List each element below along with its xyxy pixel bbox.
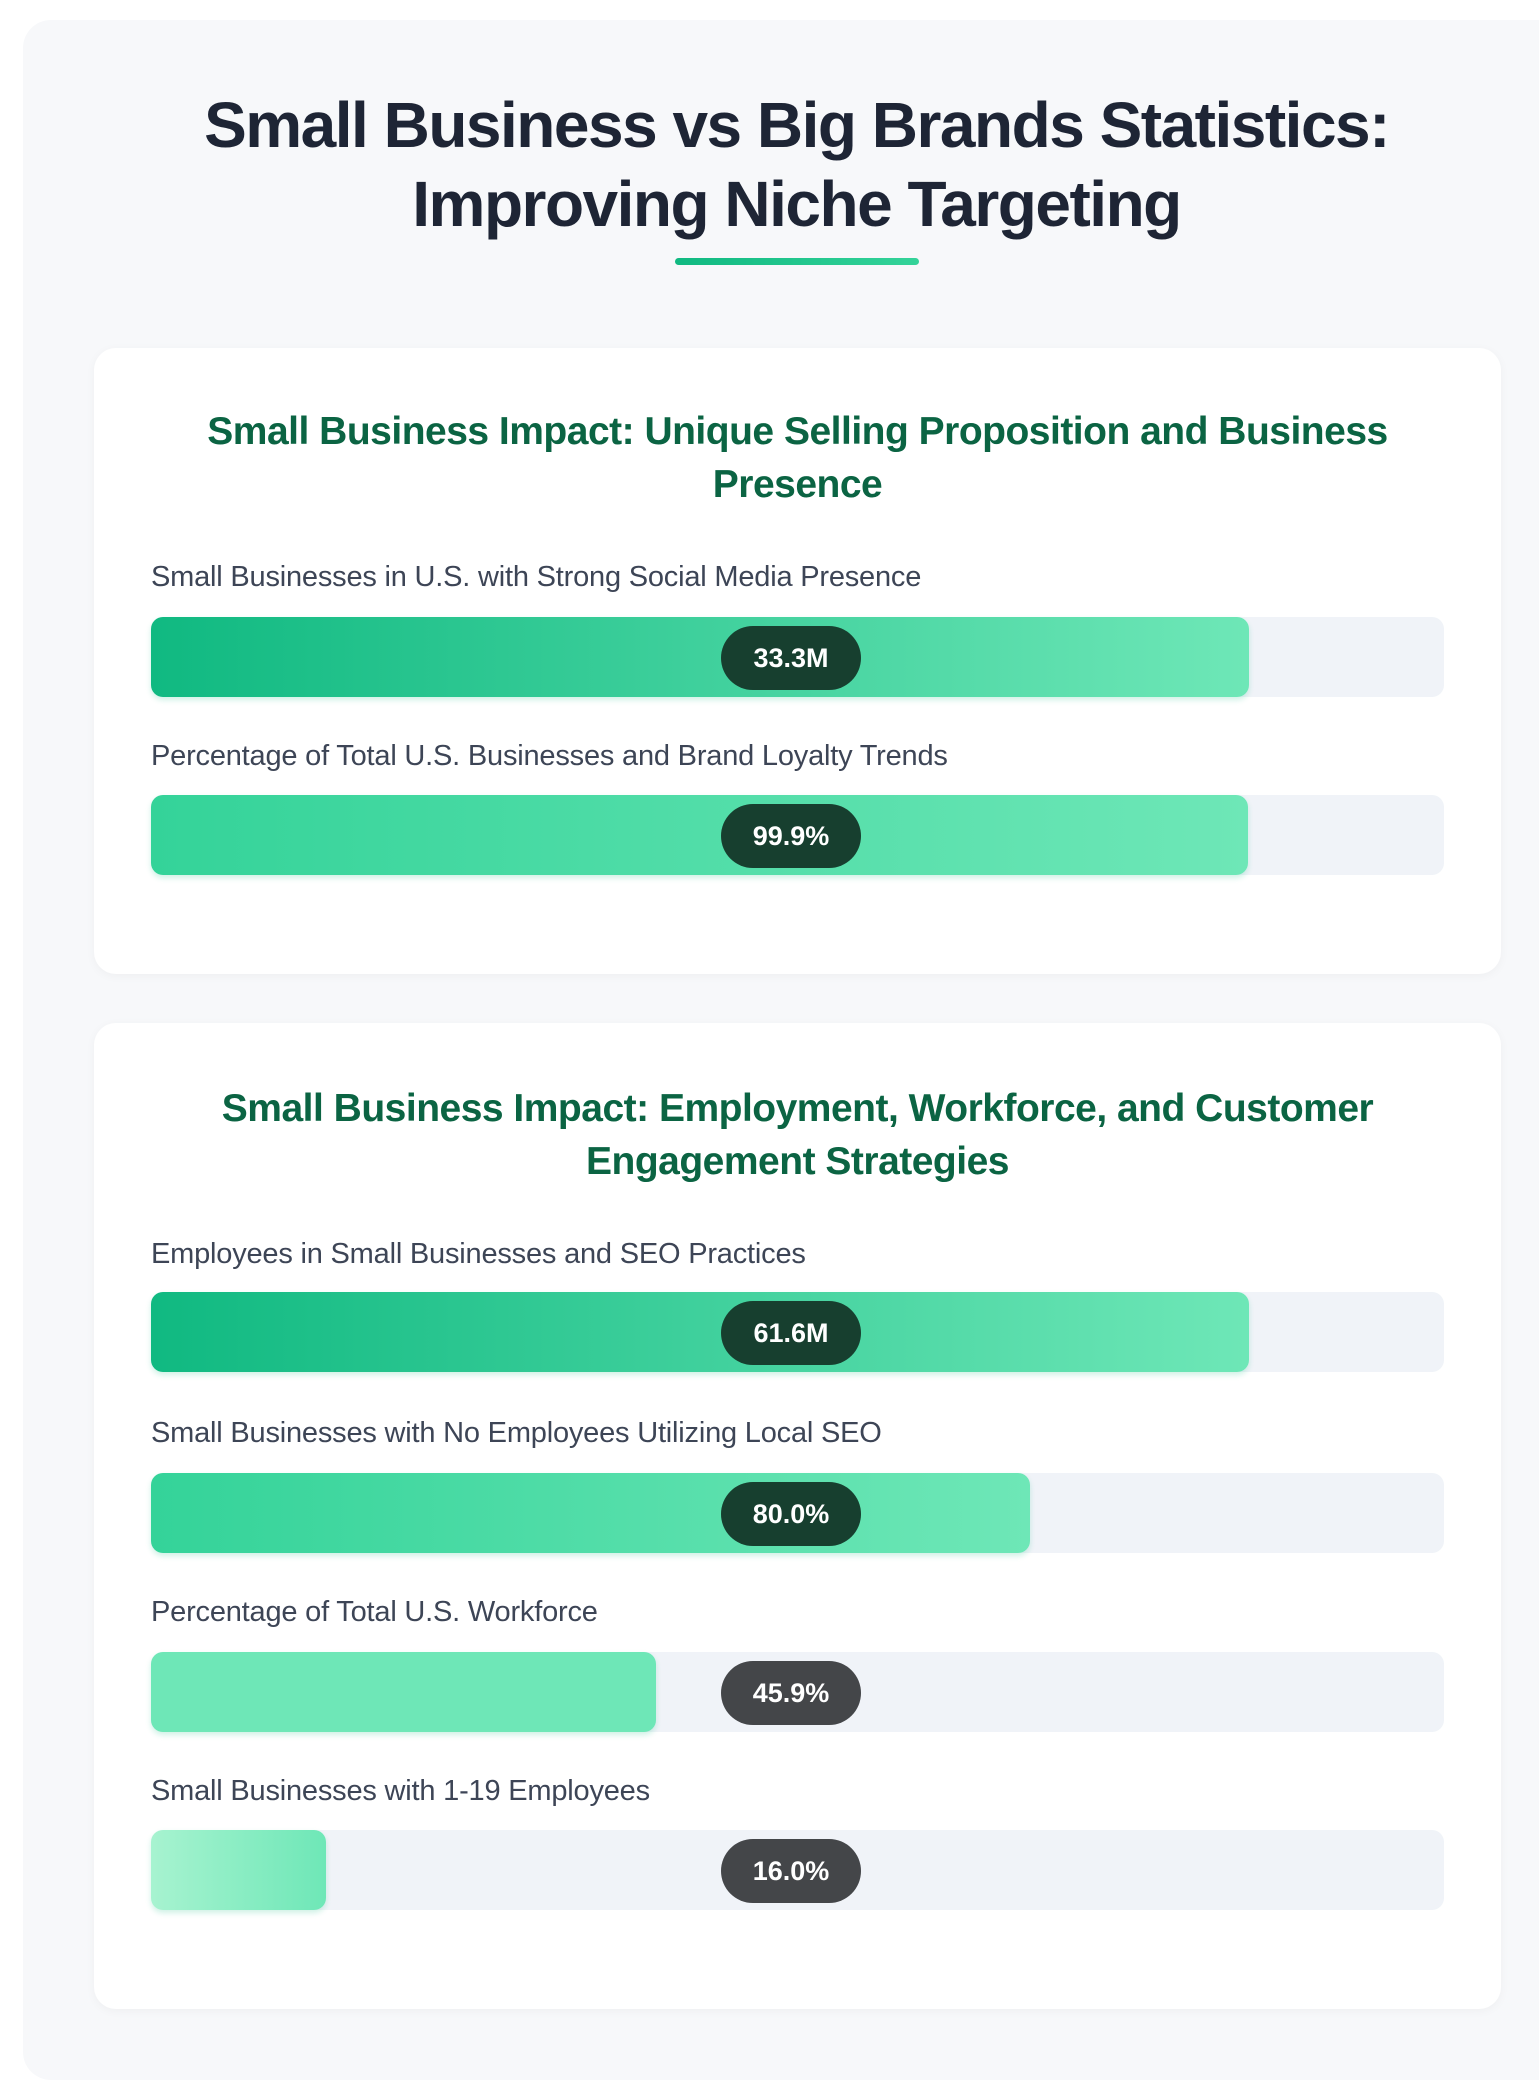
heading — [207, 410, 1388, 506]
label: Small Businesses with 1-19 Employees — [151, 1775, 650, 1807]
heading: Engagement Strategies — [586, 1140, 1009, 1183]
bar: 33.3M: 33.3M — [753, 643, 829, 673]
bar: 33.3M — [151, 617, 1444, 697]
heading: Small Business Impact: Employment, Workforce, and Customer — [222, 1087, 1373, 1130]
bar: 16.0%: 16.0% — [753, 1856, 829, 1886]
label: Small Businesses with No Employees Utilizing Local SEO — [151, 1417, 882, 1449]
title — [204, 89, 1389, 240]
heading: Presence — [713, 463, 882, 506]
bar: 99.9%: 99.9% — [753, 821, 829, 851]
bar: 80.0%: 80.0% — [753, 1499, 829, 1529]
heading: Small Business Impact: Unique Selling Proposition and Business — [207, 410, 1388, 453]
bar: 61.6M — [151, 1292, 1444, 1372]
bar: 45.9% — [151, 1652, 1444, 1732]
label: Percentage of Total U.S. Businesses and Brand Loyalty Trends — [151, 740, 948, 772]
heading — [222, 1087, 1374, 1183]
title: Small Business vs Big Brands Statistics: — [204, 89, 1389, 161]
bar: 16.0% — [151, 1830, 1444, 1910]
bar: 80.0% — [151, 1473, 1444, 1553]
label: Percentage of Total U.S. Workforce — [151, 1596, 598, 1628]
title underline — [675, 258, 919, 265]
bar: 45.9%: 45.9% — [753, 1678, 829, 1708]
panel: employment — [94, 1023, 1501, 2009]
bar: 61.6M: 61.6M — [753, 1318, 829, 1348]
label: Small Businesses in U.S. with Strong Social Media Presence — [151, 561, 921, 593]
panel: unique selling proposition — [94, 348, 1501, 974]
label: Employees in Small Businesses and SEO Practices — [151, 1238, 806, 1270]
bar: 99.9% — [151, 795, 1444, 875]
title: Improving Niche Targeting — [412, 168, 1181, 240]
